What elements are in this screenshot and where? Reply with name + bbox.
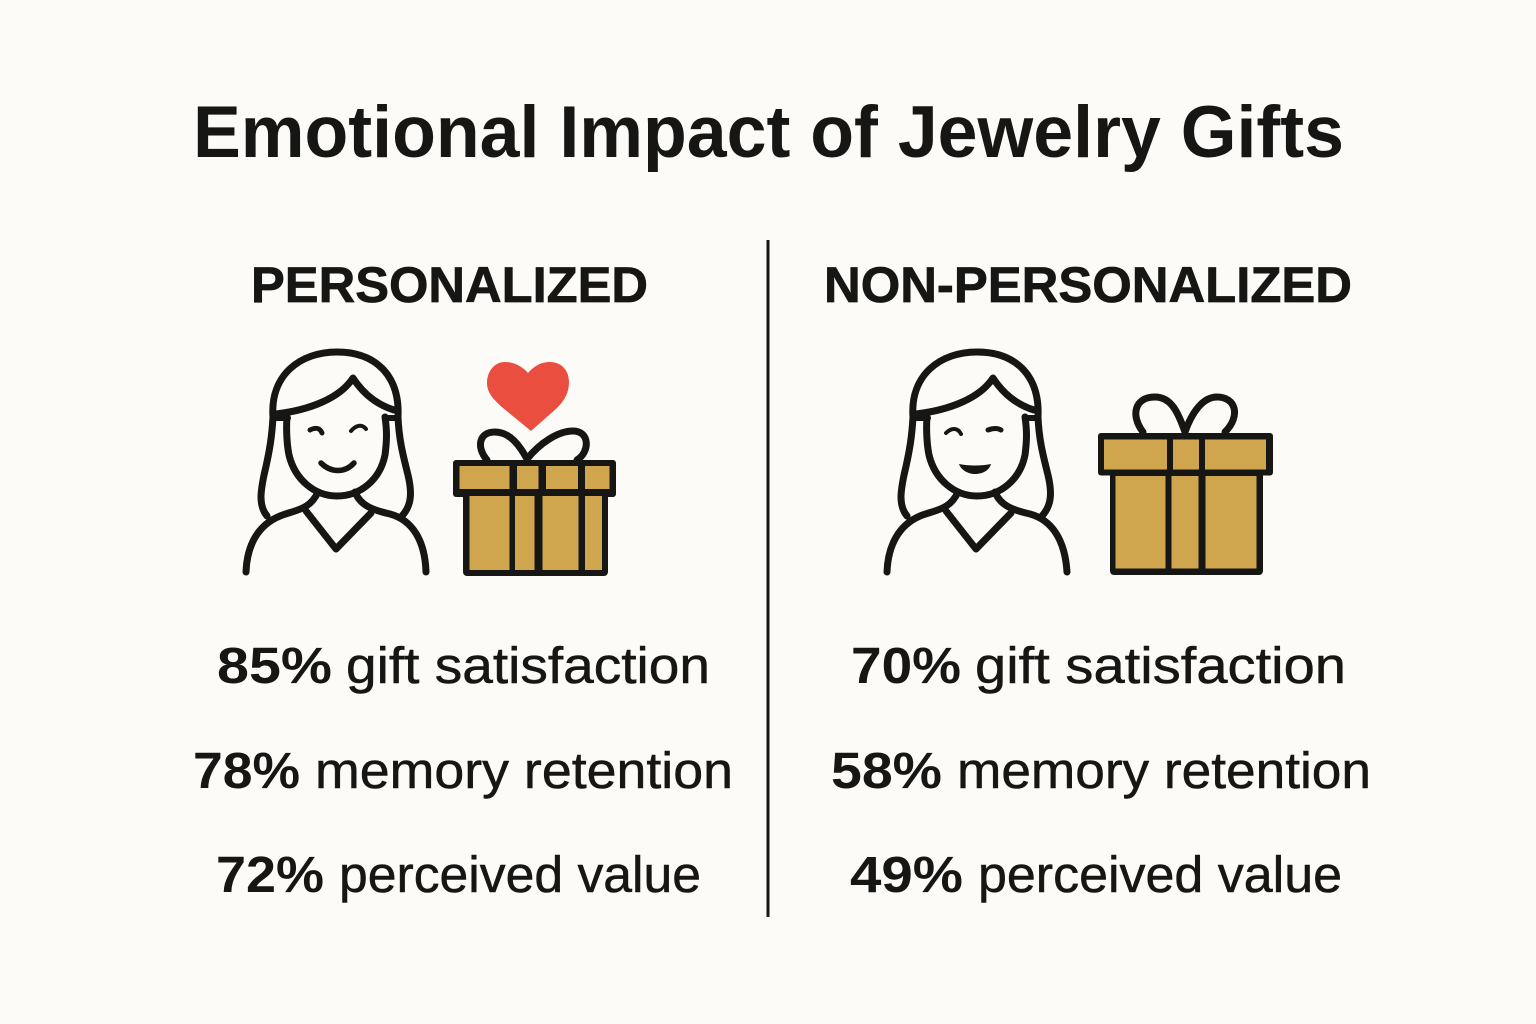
icon: smiling woman bbox=[246, 352, 426, 572]
stat: 58% memory retention: 58% bbox=[831, 742, 942, 799]
stat: 85% gift satisfaction: gift satisfaction bbox=[346, 637, 710, 694]
stat: 72% perceived value: perceived value bbox=[339, 846, 701, 903]
icon: neutral woman bbox=[887, 352, 1067, 572]
panel: non-personalized bbox=[824, 257, 1371, 903]
stat: 70% gift satisfaction bbox=[851, 637, 1346, 694]
heading: non-personalized: NON-PERSONALIZED bbox=[824, 257, 1352, 313]
stat: 85% gift satisfaction: 85% bbox=[217, 637, 332, 694]
stat: 58% memory retention: memory retention bbox=[957, 742, 1371, 799]
icon: gold gift box with bow bbox=[453, 431, 616, 576]
heading: personalized: PERSONALIZED bbox=[251, 257, 648, 313]
stat: 70% gift satisfaction: 70% bbox=[851, 637, 961, 694]
icon: gold gift box bbox=[1098, 397, 1273, 575]
title: Emotional Impact of Jewelry Gifts bbox=[193, 92, 1344, 173]
stat: 70% gift satisfaction: gift satisfaction bbox=[975, 637, 1346, 694]
panel: personalized bbox=[193, 257, 733, 903]
icon: red heart bbox=[487, 362, 569, 431]
stat: 78% memory retention: 78% bbox=[193, 742, 300, 799]
stat: 72% perceived value: 72% bbox=[216, 846, 324, 903]
stat: 78% memory retention: memory retention bbox=[315, 742, 733, 799]
stat: 49% perceived value: 49% bbox=[850, 846, 963, 903]
stat: 49% perceived value: perceived value bbox=[978, 846, 1342, 903]
center divider bbox=[766, 240, 770, 917]
stat: 85% gift satisfaction bbox=[217, 637, 710, 694]
